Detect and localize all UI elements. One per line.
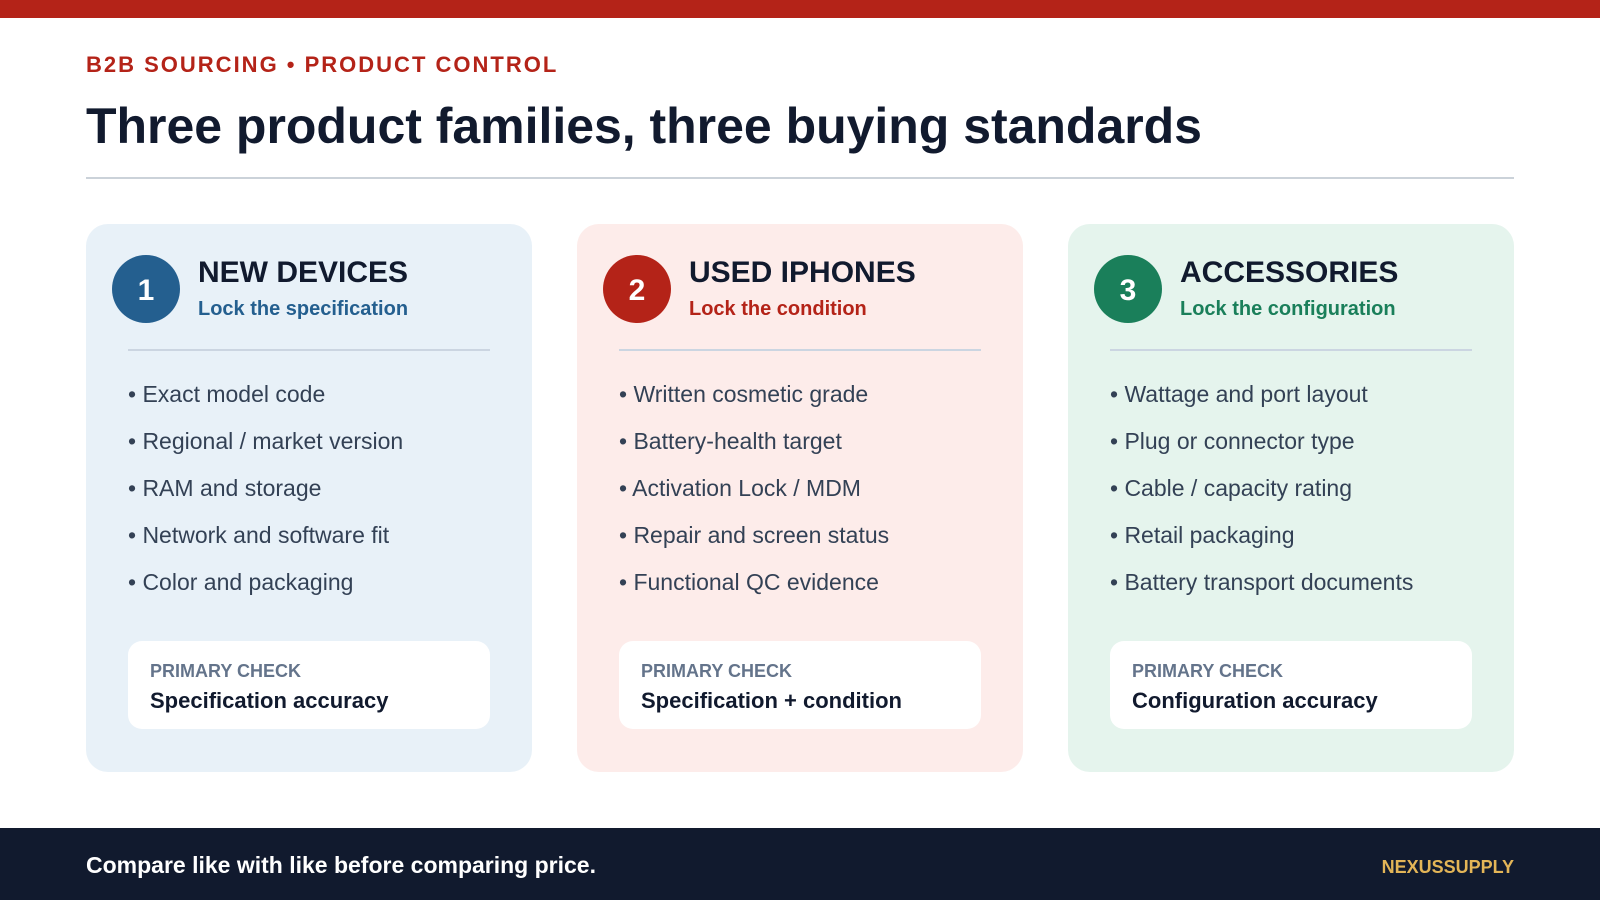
top accent bar — [0, 0, 1600, 18]
list: accessories: • Plug or connector type — [1110, 428, 1355, 454]
callout: primary check specification plus condition — [619, 641, 981, 729]
subheading: used iphones: Lock the condition — [689, 298, 867, 320]
list: new devices: • Regional / market version — [128, 428, 403, 454]
list: new devices: • Exact model code — [128, 381, 325, 407]
callout: primary check specification accuracy: Specification accuracy — [150, 688, 389, 713]
title: Three product families, three buying standards — [86, 98, 1202, 154]
subheading: new devices: Lock the specification — [198, 298, 408, 320]
icon: number 1: 1 — [138, 274, 154, 307]
list: accessories: • Cable / capacity rating — [1110, 475, 1352, 501]
icon: number 3 — [1094, 255, 1162, 323]
callout: primary check configuration accuracy: PRIMARY CHECK — [1132, 661, 1283, 681]
heading: new devices: NEW DEVICES — [198, 256, 408, 289]
icon: number 3: 3 — [1120, 274, 1136, 307]
callout: primary check specification plus condition: PRIMARY CHECK — [641, 661, 792, 681]
icon: number 2: 2 — [629, 274, 645, 307]
list: used iphones: • Activation Lock / MDM — [619, 475, 861, 501]
panel: accessories — [1068, 224, 1514, 772]
callout: primary check configuration accuracy — [1110, 641, 1472, 729]
list: used iphones: • Repair and screen status — [619, 522, 889, 548]
callout: primary check specification plus condition: Specification + condition — [641, 688, 902, 713]
list: accessories: • Retail packaging — [1110, 522, 1294, 548]
panel: used iphones — [577, 224, 1023, 772]
list: used iphones: • Functional QC evidence — [619, 569, 879, 595]
list: new devices: • RAM and storage — [128, 475, 321, 501]
icon: number 2 — [603, 255, 671, 323]
icon: number 1 — [112, 255, 180, 323]
list: accessories: • Battery transport documents — [1110, 569, 1413, 595]
list: new devices: • Network and software fit — [128, 522, 390, 548]
list: used iphones — [619, 381, 889, 595]
footer band — [0, 828, 1600, 900]
subheading: accessories: Lock the configuration — [1180, 298, 1396, 320]
list: accessories: • Wattage and port layout — [1110, 381, 1368, 407]
heading: accessories: ACCESSORIES — [1180, 256, 1398, 289]
list: used iphones: • Written cosmetic grade — [619, 381, 868, 407]
callout: primary check specification accuracy — [128, 641, 490, 729]
callout: primary check configuration accuracy: Configuration accuracy — [1132, 688, 1378, 713]
list: new devices: • Color and packaging — [128, 569, 353, 595]
list: new devices — [128, 381, 403, 595]
eyebrow: B2B SOURCING • PRODUCT CONTROL — [86, 52, 558, 77]
brand name: NEXUSSUPPLY — [1382, 857, 1514, 877]
list: accessories — [1110, 381, 1413, 595]
panel: new devices — [86, 224, 532, 772]
heading: used iphones: USED IPHONES — [689, 256, 916, 289]
callout: primary check specification accuracy: PRIMARY CHECK — [150, 661, 301, 681]
footer takeaway: Compare like with like before comparing price. — [86, 852, 596, 878]
list: used iphones: • Battery-health target — [619, 428, 842, 454]
